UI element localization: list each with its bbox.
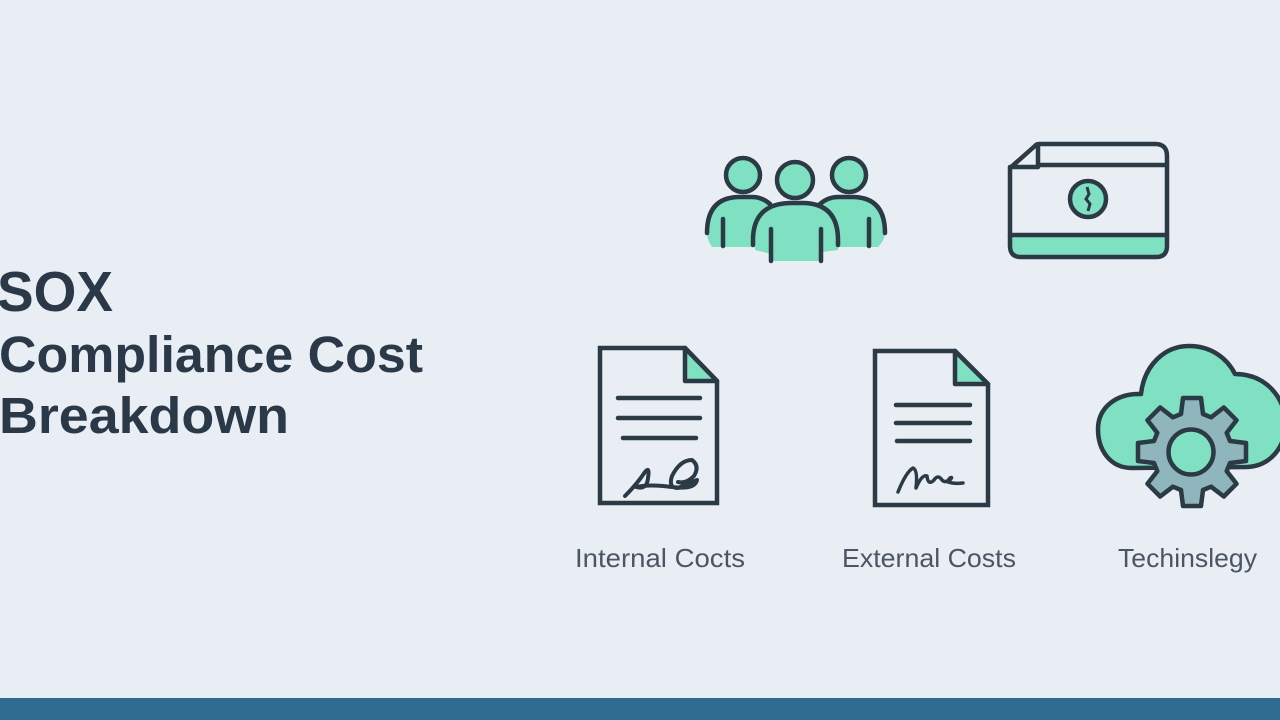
title — [0, 260, 423, 444]
label: external costs: External Costs — [842, 543, 1016, 573]
label: internal costs: Internal Cocts — [575, 543, 745, 573]
title: Compliance Cost — [0, 326, 423, 383]
icon: group of people — [707, 158, 885, 261]
footer bar — [0, 698, 1280, 720]
icon: signed document, external costs — [875, 351, 988, 505]
icon: cloud with gear — [1098, 346, 1280, 506]
label: technology: Techinslegy — [1118, 543, 1257, 573]
title: Breakdown — [0, 387, 289, 444]
icon: payment card document — [1010, 144, 1167, 257]
title: SOX — [0, 260, 113, 324]
icon: signed document, internal costs — [600, 348, 717, 503]
